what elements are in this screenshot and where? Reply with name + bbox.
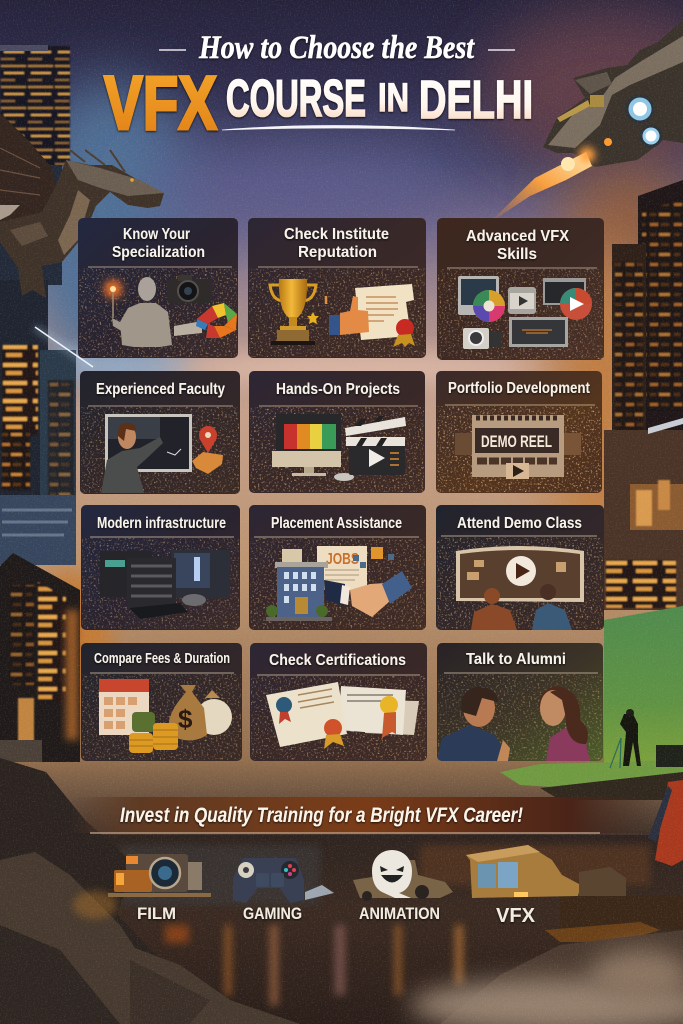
slogan text: Invest in Quality Training for a Bright VFX Career! (120, 804, 523, 827)
dragon (0, 113, 164, 298)
icon: 3D figure, camera and colour wheel (104, 275, 237, 347)
COURSE word: COURSE (226, 70, 366, 128)
panel: Experienced Faculty (80, 371, 240, 494)
heading line 2: Reputation (298, 244, 377, 261)
heading: Talk to Alumni (466, 651, 566, 668)
icon: trophy, thumbs up and certificate (270, 279, 415, 347)
icon: computer and clapperboard (272, 414, 406, 481)
heading: Compare Fees & Duration (94, 651, 230, 667)
spaceship (543, 20, 683, 167)
panel: Talk to Alumni (437, 643, 603, 761)
heading: Know Your (123, 226, 190, 243)
icon: workstation and servers (100, 550, 230, 619)
panel: Compare Fees & Duration (81, 643, 242, 761)
icon: film camera (108, 854, 211, 897)
panel: Attend Demo Class (436, 505, 604, 630)
heading: Placement Assistance (271, 515, 402, 532)
heading: Experienced Faculty (96, 381, 225, 398)
icon: two alumni in conversation (437, 686, 590, 761)
panel: Hands-On Projects (249, 371, 425, 493)
heading: Portfolio Development (448, 380, 591, 397)
heading: Check Institute (284, 226, 389, 243)
icon: monitors, colour wheels and camera (458, 276, 592, 349)
water (90, 835, 683, 1024)
jobs label: JOBS (326, 551, 359, 568)
panel: Modern infrastructure (81, 505, 240, 630)
icon: calendar, money bags and coins (99, 679, 232, 753)
heading: Modern infrastructure (97, 515, 226, 532)
water reflections (120, 845, 650, 1005)
swoosh (222, 126, 455, 130)
green screen stage (500, 606, 683, 800)
panel: Advanced VFX Skills (437, 218, 604, 360)
left city buildings (0, 45, 80, 762)
left rock cliff (0, 758, 300, 1024)
right city buildings (604, 180, 683, 610)
category: animation (353, 850, 453, 923)
icon: office building, jobs paper and handshake (266, 546, 412, 621)
icon: audience watching a demo screen (456, 546, 584, 630)
icon: smiling character bubble and vehicles (353, 850, 453, 901)
heading line 2: Specialization (112, 244, 205, 261)
icon: teacher at board and map pin (101, 414, 223, 493)
icon: game controller (233, 858, 334, 903)
heading: Advanced VFX (466, 228, 569, 245)
vfx label: VFX (496, 905, 536, 927)
flag (648, 780, 683, 866)
engine flame (488, 138, 612, 224)
subtitle: How to Choose the Best (198, 30, 475, 66)
IN word: IN (378, 76, 409, 120)
laser streak (35, 327, 93, 367)
panel: Know Your Specialization (78, 218, 238, 358)
title dashes (159, 49, 515, 51)
demo reel label: DEMO REEL (481, 432, 552, 451)
film label: FILM (137, 904, 176, 923)
panel: Placement Assistance (249, 505, 426, 630)
category: vfx (466, 845, 626, 927)
right bottom debris and spray (410, 895, 683, 1024)
heading line 2: Skills (497, 246, 537, 263)
panel: Portfolio Development (436, 371, 602, 493)
VFX word: VFX (104, 61, 217, 146)
panel: Check Institute Reputation (248, 218, 426, 358)
category: gaming (233, 858, 334, 923)
gaming label: GAMING (243, 904, 302, 923)
icon: production truck with screens (466, 845, 626, 898)
icon: certificates with ribbons (266, 682, 419, 749)
heading: Check Certifications (269, 652, 406, 669)
slogan banner (70, 797, 660, 833)
dollar sign: $ (178, 704, 193, 734)
heading: Attend Demo Class (457, 515, 582, 532)
DELHI word: DELHI (419, 70, 533, 130)
category: film (108, 854, 211, 923)
icon: demo reel (455, 415, 581, 479)
animation label: ANIMATION (359, 904, 440, 923)
title (104, 30, 533, 146)
panel: Check Certifications (250, 643, 427, 761)
heading: Hands-On Projects (276, 381, 400, 398)
